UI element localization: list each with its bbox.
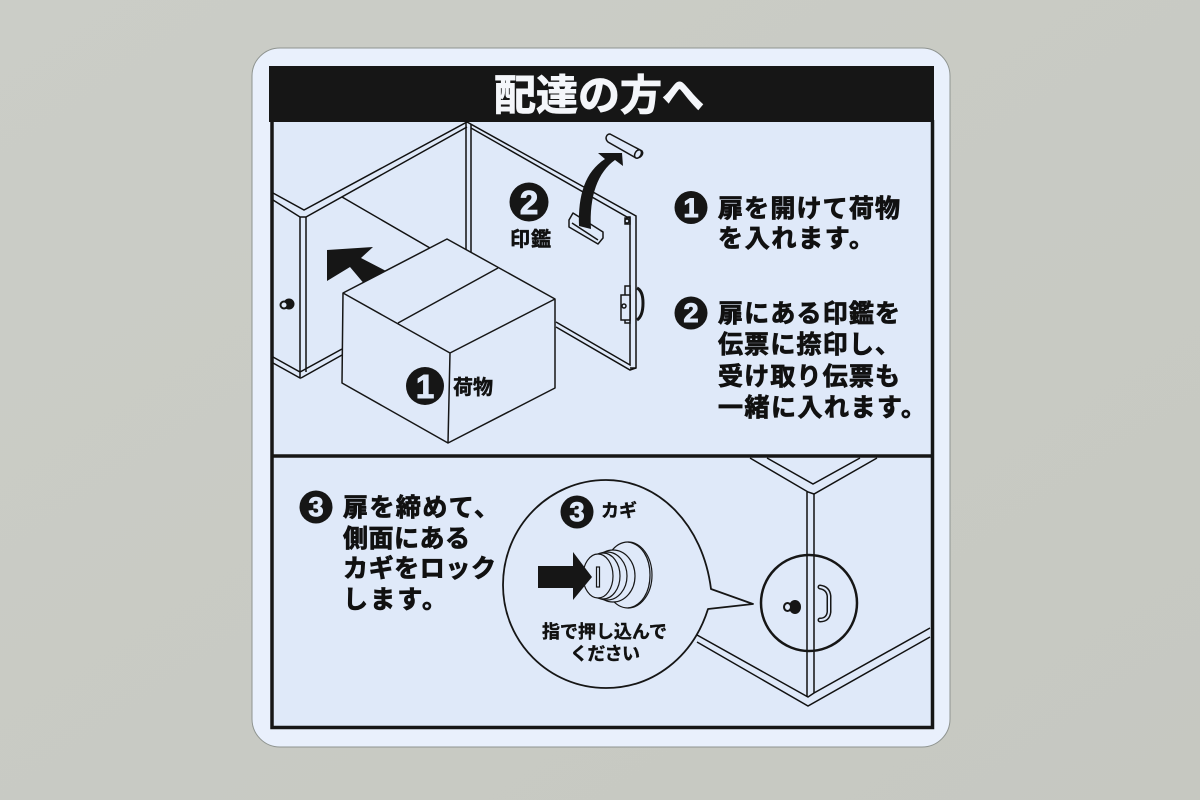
step 1 text: を入れます。 [718, 225, 874, 253]
callout text: ください [570, 644, 640, 664]
icon: key cylinder [583, 542, 652, 608]
label: 2 stamp: 印鑑 [510, 228, 551, 251]
callout bubble [503, 480, 753, 688]
icon: stamp holder [569, 213, 603, 244]
magnifier circle with key and handle [761, 555, 857, 651]
illustration: closed cabinet [697, 458, 930, 706]
step 1 text: 1 [683, 193, 699, 223]
sign card [252, 48, 950, 747]
label: 1 package [406, 367, 493, 405]
label: 1 package: 1 [416, 368, 434, 405]
step 3 text: カギをロック [343, 555, 496, 583]
arrow: push key [538, 552, 592, 600]
step 1 text [674, 191, 900, 253]
header bar [269, 66, 934, 122]
label: 1 package: 荷物 [453, 376, 493, 399]
label: 3 key: カギ [601, 501, 637, 521]
arrow: push package in [327, 247, 388, 286]
callout text [542, 621, 667, 664]
step 3 text: 側面にある [343, 525, 470, 553]
step 3 text: 3 [308, 492, 324, 522]
step 2 text: 一緒に入れます。 [718, 394, 926, 422]
label: 3 key: 3 [569, 497, 585, 527]
step 2 text: 2 [683, 298, 699, 328]
step 2 text: 伝票に捺印し、 [718, 331, 900, 359]
icon: left door knob [280, 298, 294, 310]
icon: stamp cylinder [606, 134, 643, 159]
label: 3 key [560, 496, 637, 528]
illustration: cabinet with open door [273, 122, 636, 378]
icon: door handle [621, 218, 643, 323]
step 3 text: 扉を締めて、 [343, 494, 499, 522]
step 2 text: 扉にある印鑑を [718, 300, 900, 328]
step 3 text [300, 490, 499, 614]
label: 2 stamp: 2 [520, 184, 538, 221]
package box [342, 239, 555, 443]
title: 配達の方へ [494, 72, 704, 119]
callout text: 指で押し込んで [542, 621, 667, 642]
step 2 text [674, 296, 926, 422]
step 2 text: 受け取り伝票も [718, 363, 900, 391]
panel frame [272, 120, 932, 728]
label: 2 stamp [510, 182, 551, 251]
step 1 text: 扉を開けて荷物 [718, 195, 900, 223]
step 3 text: します。 [343, 586, 447, 614]
curved arrow: take stamp [579, 153, 623, 229]
